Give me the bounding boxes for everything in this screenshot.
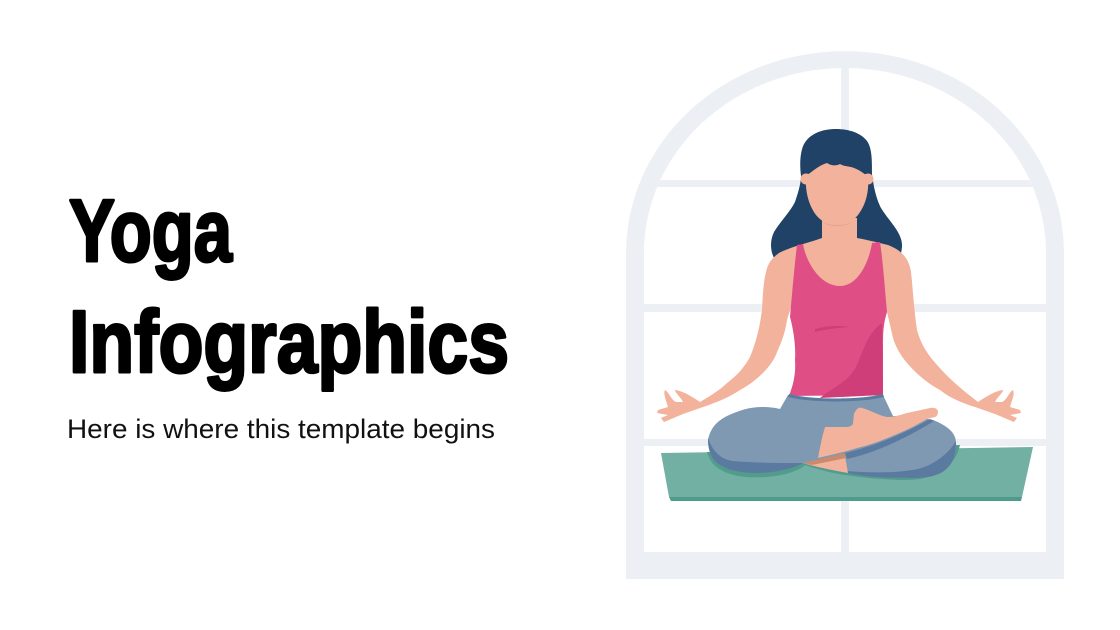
- tank top: [789, 242, 887, 398]
- yoga trousers: [708, 394, 956, 478]
- title: Infographics: [69, 292, 509, 391]
- crossed legs and foot: [803, 408, 938, 473]
- hair: [771, 129, 902, 258]
- arms and torso skin: [657, 218, 1021, 422]
- title: Yoga: [69, 181, 233, 280]
- woman meditating: [657, 129, 1021, 478]
- subtitle: Here is where this template begins: [67, 414, 495, 444]
- window: [626, 51, 1064, 579]
- slide: [69, 51, 1064, 579]
- yoga mat: [661, 445, 1033, 501]
- title: [69, 181, 509, 391]
- face: [800, 163, 874, 226]
